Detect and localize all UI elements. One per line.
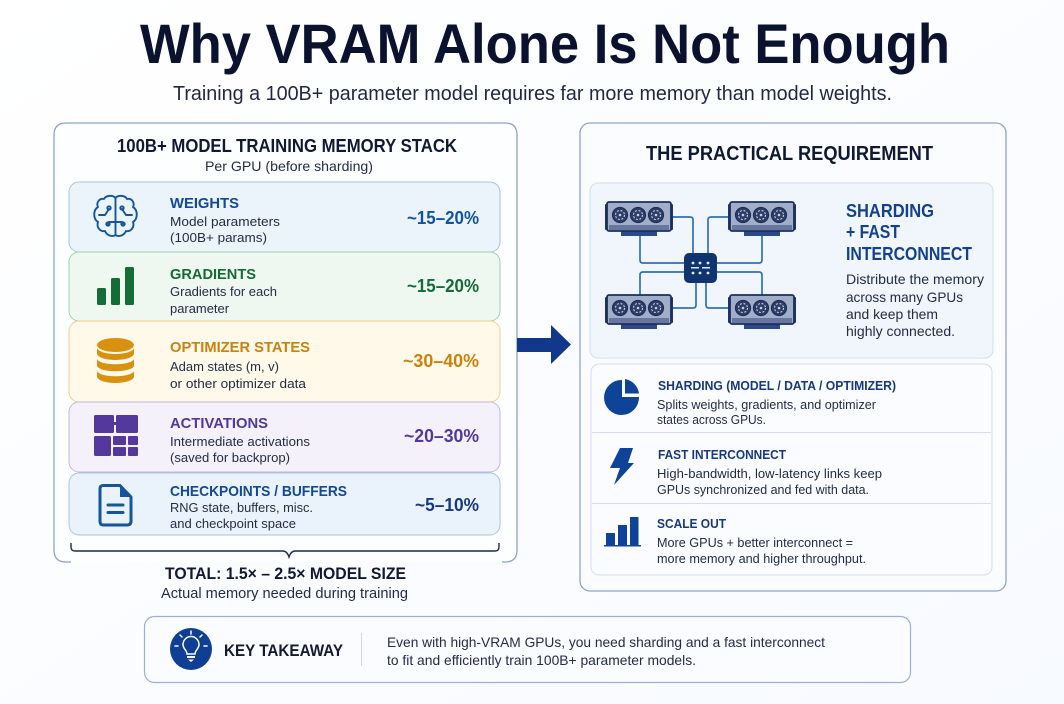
total label: TOTAL: 1.5× – 2.5× MODEL SIZE [165, 564, 406, 583]
row: weights [69, 182, 500, 252]
row: checkpoints and buffers [69, 473, 500, 535]
icon: light bulb [170, 628, 212, 670]
weights text: WEIGHTS [170, 195, 239, 212]
subtitle: Training a 100B+ parameter model requires far more memory than model weights. [173, 83, 892, 105]
icon: database [97, 338, 134, 383]
row: activations: (saved for backprop) [170, 450, 290, 465]
total note: Actual memory needed during training [161, 586, 408, 602]
gradients text: GRADIENTS [170, 266, 256, 283]
item: sharding: Splits weights, gradients, and optimizer [657, 398, 876, 412]
panel: memory stack [54, 123, 517, 562]
panel: practical requirement [580, 123, 1006, 591]
row: gradients: parameter [170, 301, 230, 316]
memory stack heading: 100B+ MODEL TRAINING MEMORY STACK [117, 136, 457, 156]
sharding description [846, 271, 984, 339]
sharding description: Distribute the memory [846, 271, 984, 287]
row: optimizer states: or other optimizer data [170, 376, 307, 391]
item: sharding: SHARDING (MODEL / DATA / OPTIMIZER) [658, 378, 896, 393]
row: checkpoints and buffers: RNG state, buffers, misc. [170, 500, 313, 515]
item: fast interconnect: GPUs synchronized and fed with data. [657, 483, 869, 497]
takeaway text: Even with high-VRAM GPUs, you need sharding and a fast interconnect [387, 634, 825, 650]
icon: brain [94, 196, 137, 236]
icon: bar chart [97, 267, 134, 305]
sharding heading: INTERCONNECT [846, 244, 972, 264]
item: scale out [604, 516, 866, 566]
takeaway text [387, 634, 825, 668]
row: gradients [69, 252, 500, 321]
checkpoints percent: ~5–10% [415, 495, 479, 515]
optimizer percent: ~30–40% [403, 351, 479, 371]
item: fast interconnect: FAST INTERCONNECT [658, 447, 786, 462]
gradients percent: ~15–20% [407, 276, 479, 296]
card: details list [591, 364, 992, 575]
sharding heading: SHARDING [846, 201, 934, 221]
row: optimizer states: Adam states (m, v) [170, 359, 279, 374]
arrow [517, 325, 571, 364]
item: scale out: more memory and higher throughput. [657, 552, 866, 566]
row: activations: Intermediate activations [170, 434, 311, 449]
item: scale out: More GPUs + better interconnect = [657, 536, 853, 550]
sharding heading [846, 201, 972, 264]
icon: scale bars [604, 517, 641, 546]
row: weights: Model parameters [170, 214, 281, 229]
sharding description: highly connected. [846, 323, 955, 339]
sharding description: and keep them [846, 306, 938, 322]
memory stack subheading: Per GPU (before sharding) [205, 158, 373, 174]
icon: switch hub [684, 253, 717, 283]
takeaway label: KEY TAKEAWAY [224, 641, 344, 660]
checkpoints text: CHECKPOINTS / BUFFERS [170, 483, 347, 500]
icon: grid blocks [94, 415, 138, 456]
row: checkpoints and buffers: and checkpoint space [170, 516, 296, 531]
sharding description: across many GPUs [846, 289, 963, 305]
activations text: ACTIVATIONS [170, 415, 268, 432]
icon: document [100, 486, 131, 525]
diagram: GPU network [605, 202, 796, 329]
item: fast interconnect [610, 447, 882, 497]
card: sharding and interconnect [590, 183, 993, 358]
sharding heading: + FAST [846, 222, 900, 242]
item: scale out: SCALE OUT [657, 516, 726, 531]
item: sharding [604, 378, 896, 427]
weights percent: ~15–20% [407, 208, 479, 228]
icon: pie chart [604, 379, 639, 415]
title: Why VRAM Alone Is Not Enough [140, 12, 950, 75]
row: gradients: Gradients for each [170, 284, 277, 299]
total bracket [71, 543, 499, 557]
takeaway text: to fit and efficiently train 100B+ parameter models. [387, 652, 696, 668]
row: weights: (100B+ params) [170, 230, 267, 245]
icon: lightning bolt [610, 448, 634, 485]
row: activations [69, 402, 500, 472]
row: optimizer states [69, 321, 500, 402]
callout: key takeaway [144, 616, 910, 682]
activations percent: ~20–30% [404, 426, 479, 446]
optimizer text: OPTIMIZER STATES [170, 339, 310, 356]
requirement heading: THE PRACTICAL REQUIREMENT [646, 143, 933, 165]
icon: document corner [120, 486, 131, 497]
item: fast interconnect: High-bandwidth, low-latency links keep [657, 467, 882, 481]
item: sharding: states across GPUs. [657, 413, 766, 427]
